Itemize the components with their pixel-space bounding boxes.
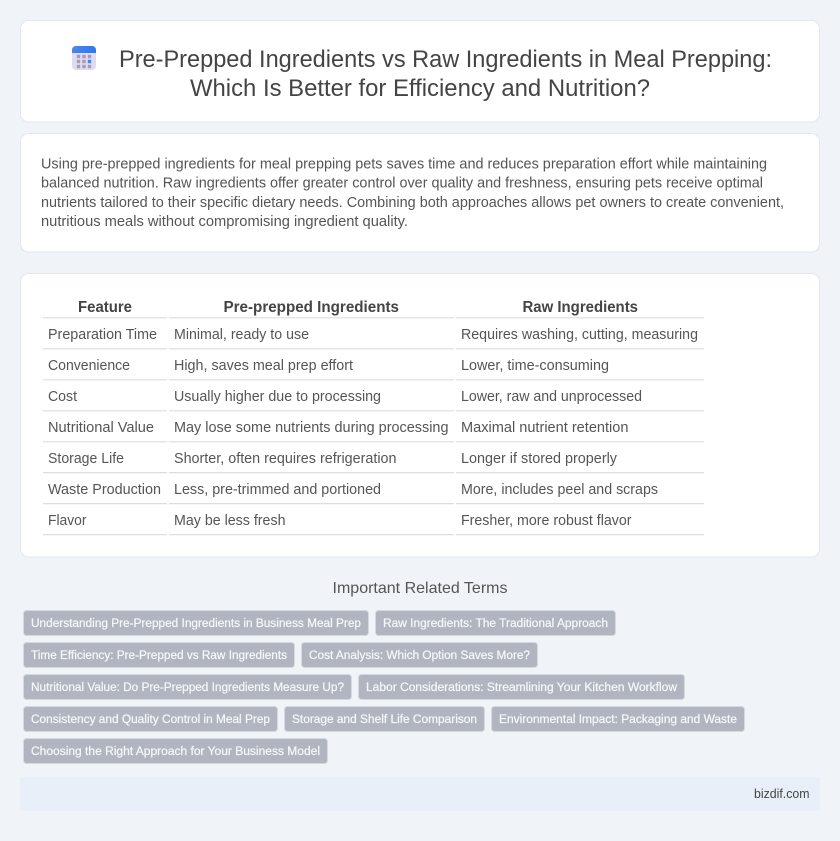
footer [20, 777, 820, 811]
row: nutritional value: Nutritional Value [48, 420, 154, 436]
table header: Feature [78, 299, 132, 316]
row: nutritional value: Maximal nutrient retention [461, 420, 628, 436]
row: preparation time: Minimal, ready to use [174, 327, 309, 343]
table header [78, 299, 638, 316]
tag: Nutritional Value: Do Pre-Prepped Ingredients Measure Up? [31, 680, 344, 694]
row: cost: Lower, raw and unprocessed [461, 389, 642, 405]
text block: intro [41, 156, 784, 230]
tag list: related terms [24, 610, 744, 764]
row: nutritional value: May lose some nutrients during processing [174, 420, 448, 436]
text block: intro: nutrients tailored to their specific dietary needs. Combining both approaches allows pet owners to create convenient, [41, 195, 784, 211]
table header: Raw Ingredients [522, 299, 638, 316]
tag: Environmental Impact: Packaging and Waste [499, 712, 737, 726]
row: convenience: High, saves meal prep effort [174, 358, 353, 374]
tag [24, 610, 368, 636]
tag [24, 706, 278, 732]
tag: Consistency and Quality Control in Meal Prep [31, 712, 270, 726]
icon: calendar [72, 46, 96, 70]
tag: Cost Analysis: Which Option Saves More? [309, 648, 530, 662]
tag [358, 674, 684, 700]
tag [492, 706, 744, 732]
panel: intro paragraph [20, 134, 820, 252]
table header: Pre-prepped Ingredients [224, 299, 399, 316]
tag [376, 610, 616, 636]
row: storage life [48, 451, 618, 467]
heading: important related terms: Important Related Terms [332, 580, 508, 597]
row: cost: Usually higher due to processing [174, 389, 381, 405]
row: flavor: May be less fresh [174, 513, 286, 529]
tag: Storage and Shelf Life Comparison [292, 712, 477, 726]
title: Pre-Prepped Ingredients vs Raw Ingredients in Meal Prepping: [119, 46, 772, 73]
row: convenience: Lower, time-consuming [461, 358, 609, 374]
row: waste production: Less, pre-trimmed and portioned [174, 482, 381, 498]
row: cost [48, 389, 642, 405]
tag [284, 706, 484, 732]
footer: site name: bizdif.com [754, 787, 810, 801]
panel: comparison table [20, 274, 820, 557]
row: convenience [48, 358, 609, 374]
row: convenience: Convenience [48, 358, 130, 374]
text block: intro: nutritious meals without compromising ingredient quality. [41, 214, 408, 230]
panel: title header [20, 20, 820, 122]
text block: intro: balanced nutrition. Raw ingredients offer greater control over quality and freshness, ensuring pets receive optimal [41, 176, 763, 192]
row: cost: Cost [48, 389, 77, 405]
row: preparation time [48, 327, 698, 343]
text block: intro: Using pre-prepped ingredients for meal prepping pets saves time and reduces preparation effort while maintaining [41, 156, 767, 172]
row: nutritional value [48, 420, 628, 436]
row: flavor: Flavor [48, 513, 87, 529]
row: storage life: Longer if stored properly [461, 451, 618, 467]
row: storage life: Shorter, often requires refrigeration [174, 451, 396, 467]
tag: Raw Ingredients: The Traditional Approach [383, 616, 608, 630]
tag: Choosing the Right Approach for Your Business Model [31, 744, 320, 758]
tag [24, 674, 352, 700]
row: flavor: Fresher, more robust flavor [461, 513, 632, 529]
title: Which Is Better for Efficiency and Nutrition? [190, 75, 650, 102]
tag [24, 738, 328, 764]
title [119, 46, 772, 102]
tag [24, 642, 294, 668]
tag: Time Efficiency: Pre-Prepped vs Raw Ingredients [31, 648, 287, 662]
row: flavor [48, 513, 632, 529]
row: preparation time: Requires washing, cutting, measuring [461, 327, 698, 343]
tag [302, 642, 538, 668]
tag: Understanding Pre-Prepped Ingredients in Business Meal Prep [31, 616, 361, 630]
tag: Labor Considerations: Streamlining Your Kitchen Workflow [366, 680, 677, 694]
row: storage life: Storage Life [48, 451, 124, 467]
row: waste production: Waste Production [48, 482, 161, 498]
row: waste production: More, includes peel and scraps [461, 482, 658, 498]
row: waste production [48, 482, 658, 498]
row: preparation time: Preparation Time [48, 327, 157, 343]
